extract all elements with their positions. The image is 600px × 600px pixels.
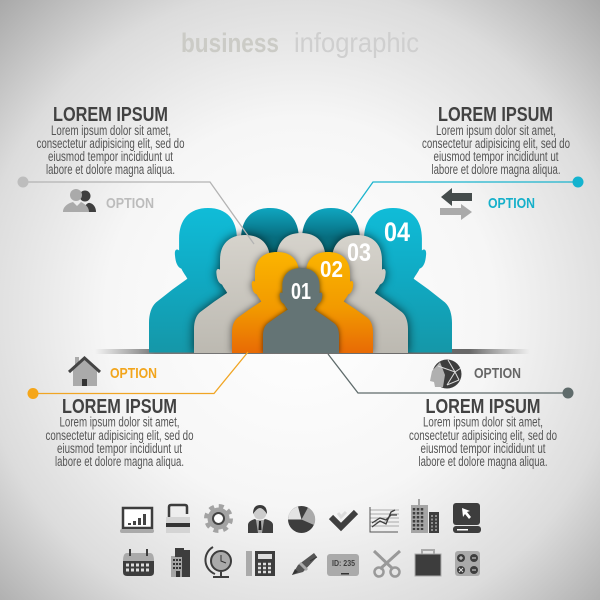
icon: office building [171, 548, 190, 577]
text block: top right: LOREM IPSUM [438, 104, 553, 126]
title [181, 27, 419, 58]
text block: top right: Lorem ipsum dolor sit amet, [436, 123, 556, 138]
callout line: bottom left [28, 352, 248, 399]
icon set [120, 499, 481, 577]
text block: bottom right: LOREM IPSUM [426, 396, 540, 418]
icon: laptop chart [120, 508, 154, 533]
text block: bottom left: labore et dolore magna aliqua. [55, 454, 184, 469]
person: orange right [302, 248, 378, 353]
person: grey right [306, 235, 408, 353]
icon: id badge [327, 554, 359, 576]
option label: top right: OPTION [488, 195, 535, 212]
icon: id badge: ID: 235 [332, 558, 355, 568]
number 01: 01 [291, 278, 311, 304]
icon: open lock [166, 505, 190, 533]
icon: calendar [123, 549, 154, 576]
text block: bottom left: eiusmod tempor incididunt ut [57, 441, 182, 456]
option label: bottom left: OPTION [110, 365, 157, 382]
icon: globe clock [205, 547, 231, 577]
text block: bottom right: labore et dolore magna aliqua. [418, 454, 548, 469]
text block: bottom left: LOREM IPSUM [62, 396, 177, 418]
icon: house [69, 357, 100, 386]
person: grey middle [274, 229, 327, 268]
text block: top right [422, 104, 570, 177]
person: back blue right [302, 208, 360, 252]
floor shadow [95, 349, 530, 354]
title: business [181, 28, 279, 58]
callout line: top right [351, 176, 584, 213]
person: front grey [263, 268, 339, 353]
text block: top left: eiusmod tempor incididunt ut [48, 149, 173, 164]
icon: math keys [455, 551, 480, 576]
text block: top left: consectetur adipisicing elit, sed do [36, 136, 184, 151]
people chart [149, 208, 452, 353]
icon: businessman [248, 505, 273, 533]
person: blue right [364, 208, 452, 352]
text block: top left: LOREM IPSUM [53, 104, 168, 126]
icon: monitor cursor [453, 503, 481, 533]
icon: scissors [374, 551, 400, 576]
callout line: bottom right [328, 354, 574, 398]
text block: bottom left [46, 396, 194, 469]
person: blue left [149, 208, 237, 352]
icon: line chart [370, 507, 399, 532]
number 04: 04 [384, 217, 410, 247]
text block: bottom left: Lorem ipsum dolor sit amet, [60, 414, 180, 430]
person: orange left [227, 248, 303, 353]
option label: bottom right: OPTION [474, 365, 521, 382]
icon: calculator [246, 551, 275, 576]
icon: head with network [430, 360, 462, 388]
text block: bottom right: Lorem ipsum dolor sit amet, [423, 414, 543, 430]
text block: top left: Lorem ipsum dolor sit amet, [51, 123, 171, 138]
icon: skyscrapers [411, 499, 439, 533]
icon: arrows [440, 188, 472, 220]
icon: two people [63, 189, 96, 212]
text block: top left: labore et dolore magna aliqua. [46, 162, 175, 177]
text block: bottom right: eiusmod tempor incididunt ut [420, 441, 546, 456]
number 03: 03 [347, 239, 371, 267]
callout line: top left [18, 176, 254, 244]
icon: check [331, 512, 356, 527]
icon: briefcase [415, 550, 441, 576]
text block: top left [36, 104, 184, 177]
person: back blue left [241, 208, 298, 253]
number 02: 02 [320, 256, 343, 282]
icon: pen [292, 553, 317, 575]
title: infographic [294, 27, 419, 58]
person: grey left [194, 235, 296, 353]
icon: gear [206, 506, 231, 531]
text block: bottom right [409, 396, 557, 469]
option label: top left: OPTION [106, 195, 154, 212]
icon: pie chart [288, 506, 315, 533]
text block: bottom left: consectetur adipisicing elit, sed do [46, 428, 194, 443]
